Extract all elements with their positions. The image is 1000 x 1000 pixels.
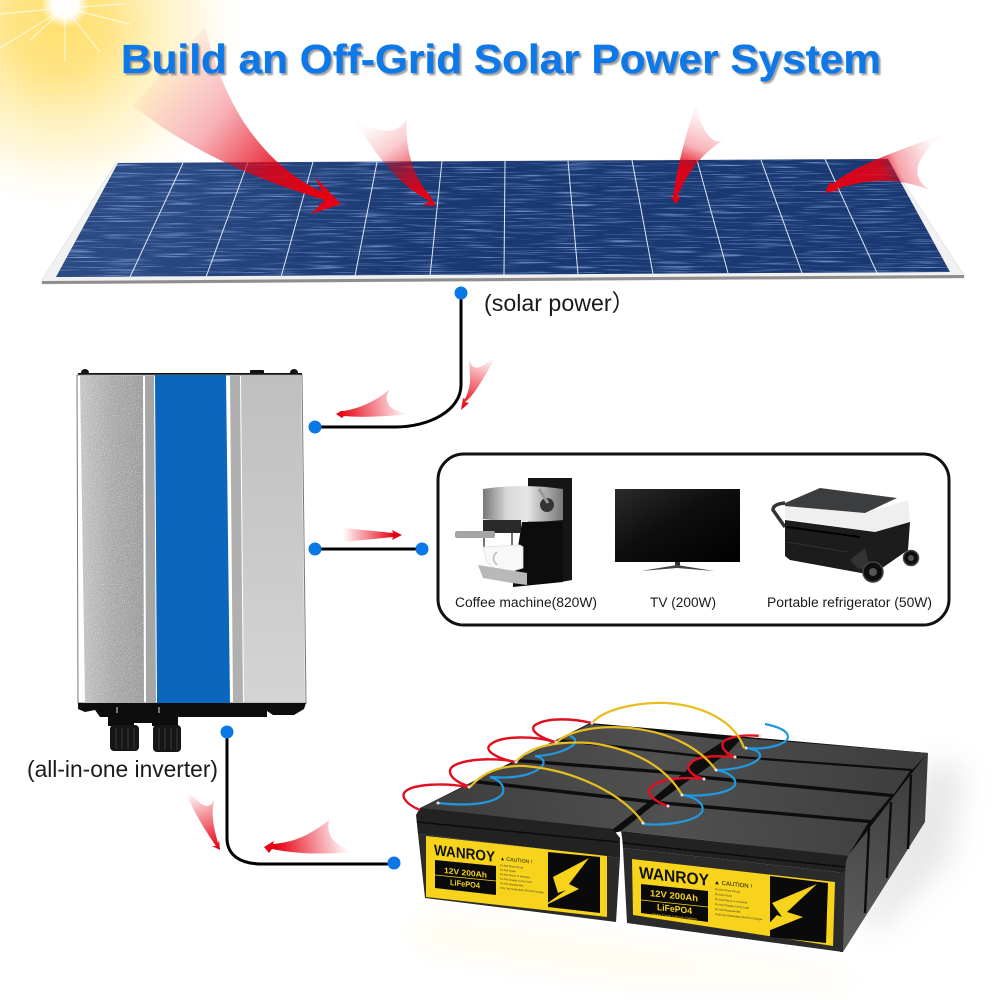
inverter body [77, 375, 306, 703]
arrow: flow into inverter [336, 389, 412, 418]
icon: TV [615, 489, 740, 571]
inverter top edge [78, 369, 302, 377]
solar panel [40, 155, 970, 284]
right front battery: Only Use Dedicated LiFePO4 Charger [715, 912, 762, 921]
title: Build an Off-Grid Solar Power System [121, 36, 881, 82]
left front battery [416, 808, 620, 922]
left front battery: Only Use Dedicated LiFePO4 Charger [500, 886, 544, 894]
right front battery: WANROY [639, 863, 709, 890]
panel: appliances [438, 454, 949, 625]
lightning bolt [758, 884, 817, 935]
right front battery [621, 831, 848, 952]
right front battery: ▲ CAUTION ! [714, 880, 752, 890]
arrow: sun ray 3 [670, 105, 722, 204]
right front battery: LiFePO4 [657, 902, 692, 916]
appliance captions: Portable refrigerator (50W) [767, 595, 932, 610]
right front battery: Do Not Pierce or Immerse [715, 897, 748, 905]
right front battery: Do Not Crush [715, 892, 732, 898]
icon: coffee machine [455, 478, 572, 587]
left front battery: 12V 200Ah [444, 866, 487, 880]
left front battery: Do Not Charge in Any Load [500, 877, 532, 884]
appliance captions: Coffee machine(820W) [455, 595, 597, 610]
left front battery: Do Not Crush [500, 868, 516, 873]
arrow: flow to appliances [343, 528, 402, 542]
appliance captions: TV (200W) [650, 595, 716, 610]
rear battery side faces [840, 753, 928, 952]
left front battery: Do Not Pierce or Immerse [500, 872, 530, 879]
right front battery: 12V 200Ah [650, 888, 698, 903]
arrow: panel flow down [461, 354, 498, 410]
wire: inverter to batteries [220, 726, 400, 870]
blue center stripe [155, 375, 230, 703]
right front battery: Do Not Disassemble [715, 907, 741, 914]
left front battery: Do Not Short Circuit [500, 863, 523, 870]
right front battery: Deep Cycle Lithium Battery [652, 912, 698, 921]
arrow: flow out of inverter [183, 785, 220, 850]
wire: solar panel to inverter [308, 286, 468, 434]
arrow: sun ray 1 [133, 27, 341, 214]
arrow: sun ray 4 [825, 132, 950, 193]
yellow label [632, 859, 835, 946]
lightning bolt [542, 858, 589, 907]
left front battery: WANROY [434, 842, 495, 866]
left front battery: LiFePO4 [450, 878, 480, 890]
yellow label [426, 836, 607, 917]
icon: portable refrigerator [773, 488, 918, 582]
inverter bottom edge and connectors [78, 703, 306, 752]
label: solar power: (solar power） [484, 290, 635, 316]
appliance captions [455, 595, 932, 610]
right front battery: Do Not Short Circuit [715, 887, 740, 894]
yellow battery cables [470, 703, 744, 823]
battery terminals [436, 722, 762, 824]
right front battery: Do Not Charge in Any Load [715, 902, 749, 910]
red battery cables [404, 719, 760, 810]
label: all-in-one inverter: (all-in-one inverter) [27, 756, 218, 782]
battery top surfaces [420, 723, 928, 857]
inverter [77, 369, 306, 752]
arrow: flow from batteries [264, 820, 357, 854]
left front battery: Do Not Disassemble [500, 881, 524, 888]
wire: inverter to appliances [308, 542, 428, 556]
left front battery: ▲ CAUTION ! [500, 856, 532, 866]
battery floor shadow [420, 760, 965, 985]
sun glow [0, 0, 260, 220]
battery bank [404, 703, 928, 952]
arrow: sun ray 2 [353, 117, 436, 206]
blue battery cables [438, 724, 788, 824]
